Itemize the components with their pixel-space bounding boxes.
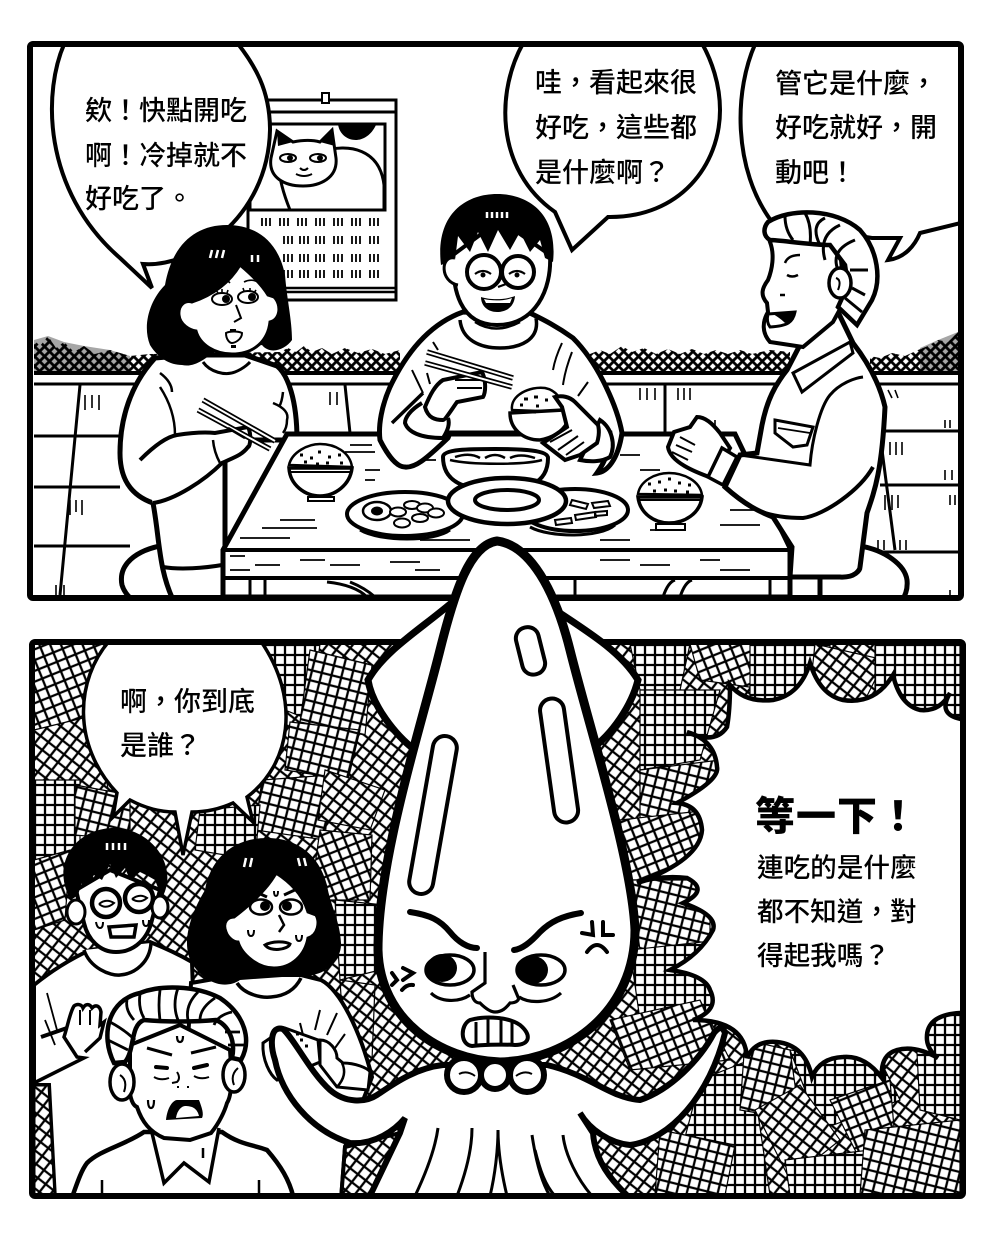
right hand and cuff bbox=[580, 420, 613, 461]
text: squid speech: 都不知道，對 bbox=[757, 897, 917, 927]
panel 2 frame bbox=[32, 642, 963, 1196]
head bbox=[760, 241, 843, 350]
rice bowl: right bbox=[638, 473, 702, 530]
background brick wall bbox=[34, 384, 960, 596]
chopsticks bbox=[198, 400, 275, 449]
woman hair bbox=[147, 225, 292, 366]
text: slick-haired man's speech bbox=[775, 69, 937, 188]
text: slick-haired man's speech: 好吃就好，開 bbox=[775, 113, 937, 143]
shirt bbox=[725, 312, 885, 577]
hand and watch bbox=[668, 417, 730, 478]
text: woman's speech: 欸！快點開吃 bbox=[85, 96, 247, 126]
glasses man bbox=[379, 194, 622, 473]
speech bubble: panel 2 bbox=[83, 640, 286, 855]
jagged thought cloud bbox=[637, 663, 970, 1078]
wall calendar bbox=[248, 93, 396, 300]
woman arm and hand bbox=[140, 427, 250, 503]
squid fins bbox=[368, 600, 638, 750]
text: glasses man's speech: 好吃，這些都 bbox=[535, 113, 697, 143]
bowl in hand bbox=[263, 1028, 320, 1080]
body highlights bbox=[407, 625, 580, 896]
stools bbox=[118, 544, 910, 595]
text: slick-haired man's speech: 動吧！ bbox=[775, 158, 856, 188]
rice bowl in hand bbox=[512, 388, 565, 412]
head bbox=[453, 220, 550, 325]
anger marks bbox=[392, 922, 613, 990]
panel: family dinner bbox=[30, 40, 965, 604]
text: squid speech: 得起我嗎？ bbox=[757, 941, 890, 971]
speech bubble: slick-haired man bbox=[741, 40, 965, 260]
text: panel 2 speech bbox=[120, 687, 255, 761]
text: squid speech: 連吃的是什麼 bbox=[757, 853, 917, 883]
text: squid heading: 等一下！ bbox=[755, 795, 919, 839]
squid tentacles bbox=[272, 1028, 725, 1200]
panel 1 frame bbox=[30, 44, 961, 598]
raised hand bbox=[34, 1005, 104, 1083]
torso bbox=[379, 312, 622, 473]
text: woman's speech: 好吃了。 bbox=[85, 184, 193, 214]
background hedge bbox=[34, 332, 960, 373]
woman face bbox=[179, 265, 279, 354]
left cuff and hand bbox=[405, 403, 449, 438]
bow tie bbox=[447, 1058, 544, 1092]
frightened glasses man bbox=[34, 828, 200, 1200]
hair bbox=[764, 212, 877, 325]
text: panel 2 speech: 啊，你到底 bbox=[120, 687, 255, 717]
slick-haired man bbox=[668, 212, 885, 577]
chopsticks bbox=[425, 352, 513, 387]
empty center plate bbox=[448, 478, 566, 524]
text: glasses man's speech: 哇，看起來很 bbox=[535, 68, 697, 98]
speech bubble: woman bbox=[52, 40, 270, 288]
rice bowl: left bbox=[289, 444, 352, 501]
text: woman's speech: 啊！冷掉就不 bbox=[85, 141, 247, 171]
text: woman's speech bbox=[85, 96, 247, 214]
text: glasses man's speech: 是什麼啊？ bbox=[535, 158, 670, 188]
text: panel 2 speech: 是誰？ bbox=[120, 731, 201, 761]
panel: squid interrupts bbox=[32, 640, 970, 1200]
woman body bbox=[120, 355, 297, 604]
plate: stir-fried vegetables bbox=[522, 489, 628, 535]
plate: egg and sausages bbox=[347, 492, 463, 539]
frightened woman bbox=[180, 838, 400, 1200]
calendar cat bbox=[271, 124, 384, 210]
squid character bbox=[368, 541, 638, 1092]
soup bowl bbox=[443, 449, 548, 490]
text: squid speech bbox=[757, 853, 917, 971]
text: glasses man's speech bbox=[535, 68, 697, 188]
squid angry face bbox=[392, 912, 613, 1046]
frightened slick-haired man bbox=[71, 988, 294, 1200]
dining table bbox=[223, 434, 790, 597]
squid body bbox=[378, 541, 635, 1062]
speech bubble: glasses man bbox=[505, 40, 720, 250]
woman with chopsticks bbox=[120, 225, 297, 604]
text: slick-haired man's speech: 管它是什麼， bbox=[775, 69, 937, 99]
halftone grid background bbox=[32, 642, 963, 1196]
